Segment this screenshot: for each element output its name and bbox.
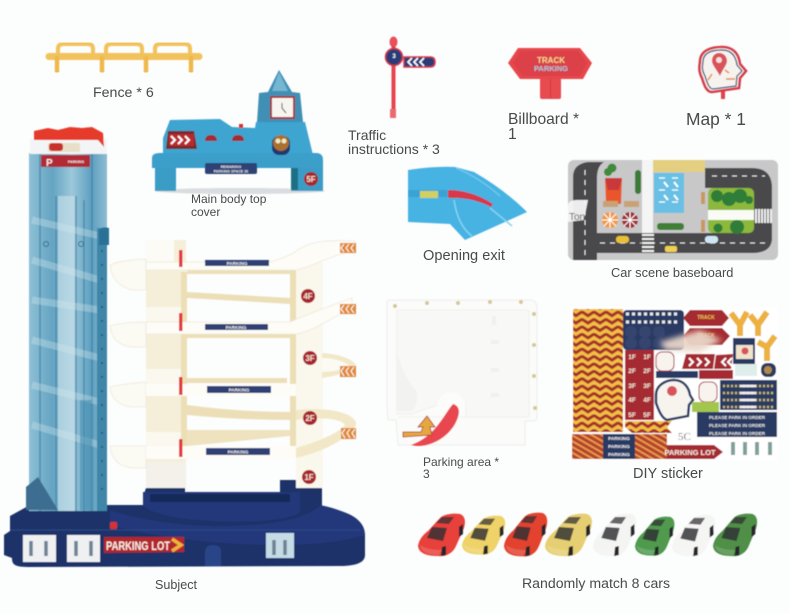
- label: fence: Fence * 6: [93, 85, 154, 101]
- map sticker: [656, 380, 693, 420]
- main subject: parking tower toy: [4, 127, 365, 567]
- ramp 3F markings: [179, 304, 356, 331]
- label: car scene baseboard: Car scene baseboard: [611, 265, 733, 280]
- base platform: [4, 480, 365, 567]
- ramp level 1F: PARKING: [228, 450, 249, 454]
- label: billboard: Billboard *: [508, 111, 579, 128]
- red roof cap: PARKING: [68, 160, 84, 164]
- floor number stickers: 4F: [628, 397, 636, 404]
- icon: main body top cover: 5F: [306, 175, 316, 184]
- floor number stickers: 5F: [643, 412, 651, 419]
- label: subject: Subject: [155, 578, 198, 592]
- image: DIY sticker sheet: [570, 307, 778, 461]
- floor number badges: 2F: [305, 414, 315, 423]
- floor number badges: [301, 289, 317, 484]
- image: DIY sticker sheet: 5C: [678, 431, 691, 443]
- label: DIY sticker: DIY sticker: [633, 466, 703, 482]
- floor number stickers: 2F: [643, 368, 651, 375]
- red billboard stickers: [683, 310, 730, 345]
- toy cars: eight cars: [418, 513, 757, 556]
- ramp level 2F: PARKING: [229, 388, 250, 392]
- floor number badges: 4F: [303, 292, 313, 301]
- floor number stickers: 1F: [628, 354, 636, 361]
- parking lot sign: PARKING LOT: [106, 539, 171, 553]
- label: billboard: 1: [508, 126, 517, 143]
- roads: [573, 162, 772, 260]
- zigzag ribbon: [625, 421, 672, 433]
- ramp level 4F: [110, 241, 355, 290]
- icon: billboard: [508, 48, 592, 99]
- people stickers: [733, 442, 770, 455]
- icon: traffic instructions sign: [386, 36, 435, 118]
- label: map: Map * 1: [686, 109, 746, 129]
- red billboard stickers: TRACK: [697, 315, 715, 321]
- label: randomly match 8 cars: Randomly match 8 cars: [522, 575, 670, 591]
- label: parking area: Parking area *: [423, 455, 499, 469]
- navy chevron and circle stickers: [623, 310, 684, 350]
- ramp 4F markings: PARKING: [227, 261, 248, 266]
- ramp 3F markings: PARKING: [226, 325, 247, 330]
- label: parking area: 3: [423, 467, 430, 481]
- image: car scene baseboard: [568, 160, 778, 260]
- ramp level 2F: [110, 353, 356, 407]
- icon: fence: [49, 44, 199, 71]
- parking lot sticker: [664, 445, 723, 459]
- icon: main body top cover: REMAINING: [221, 165, 241, 169]
- red roof cap: P: [46, 158, 53, 169]
- sign map sticker: [733, 338, 776, 377]
- cream cross braces: [187, 270, 291, 446]
- support columns: [146, 240, 323, 488]
- floor number stickers: 3F: [628, 383, 636, 390]
- bottom parking strip: PARKING: [608, 452, 630, 458]
- text fragment on baseboard: Ton: [569, 212, 585, 223]
- floor number stickers: [625, 350, 654, 420]
- ramp level 3F: [110, 298, 352, 347]
- bottom parking strip: PARKING: [608, 436, 630, 442]
- floor number stickers: 2F: [628, 368, 636, 375]
- parking rows: PLEASE PARK IN ORDER: [709, 423, 766, 428]
- yellow arrow stickers: [731, 312, 775, 361]
- floor number badges: 3F: [305, 354, 315, 363]
- floor number stickers: 4F: [643, 397, 651, 404]
- label: traffic instructions: Traffic: [348, 127, 386, 143]
- icon: billboard: PARKING: [534, 64, 568, 73]
- floor number stickers: 5F: [628, 412, 636, 419]
- passenger windows: [23, 533, 294, 562]
- parking rows: PLEASE PARK IN ORDER: [709, 415, 766, 420]
- red roof cap: [30, 127, 107, 169]
- ramp 4F markings: [179, 243, 356, 267]
- parking rows: [697, 380, 777, 437]
- bottom parking strip: PARKING: [608, 444, 630, 450]
- chevron road signs: [656, 354, 733, 379]
- ramp level 1F: [110, 409, 356, 468]
- red billboard stickers: TRACK: [697, 333, 715, 339]
- zigzag strip: [573, 309, 623, 432]
- icon: opening exit track: [408, 167, 527, 240]
- parking lot sticker: PARKING LOT: [664, 448, 716, 457]
- bottom parking strip: [572, 434, 667, 459]
- label: traffic instructions: instructions * 3: [348, 141, 440, 157]
- icon: traffic instructions sign: 3: [392, 54, 396, 60]
- icon: billboard: TRACK: [537, 56, 565, 65]
- floor number stickers: 1F: [643, 354, 651, 361]
- icon: main body top cover: PARKING SPACE 36: [214, 170, 248, 174]
- label: main body top cover: Main body top: [191, 192, 267, 206]
- icon: map sign: [699, 47, 746, 99]
- label: opening exit: Opening exit: [423, 248, 505, 264]
- part: parking area plate: [387, 300, 537, 446]
- label: main body top cover: cover: [191, 205, 220, 219]
- clock stickers: [656, 352, 717, 402]
- floor number stickers: 3F: [643, 383, 651, 390]
- parking rows: PLEASE PARK IN ORDER: [709, 431, 766, 436]
- glass tower: [26, 153, 109, 511]
- icon: main body top cover: [152, 70, 325, 194]
- floor number badges: 1F: [304, 473, 314, 482]
